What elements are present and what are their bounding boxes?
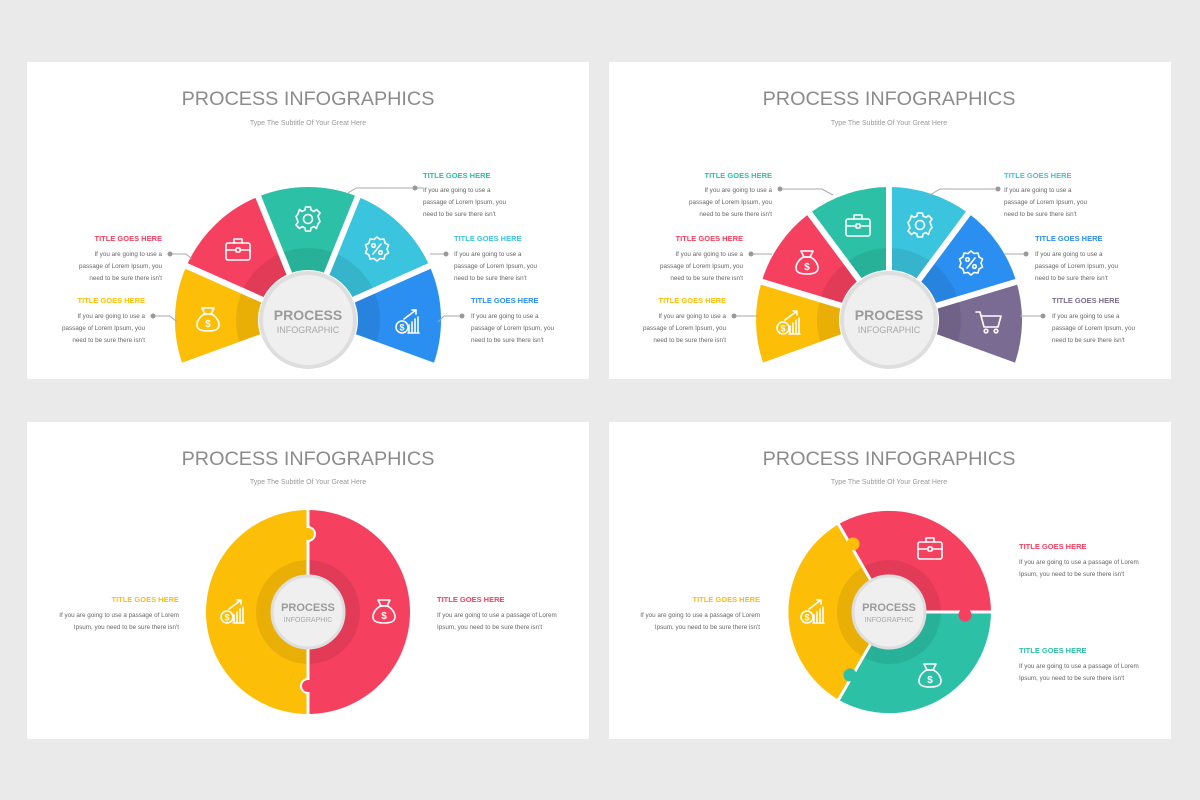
label: blue [1035,234,1118,282]
label: yellow: If you are going to use a [77,313,145,320]
circle chart: PROCESS [862,602,916,614]
label: blue: need to be sure there isn't [471,337,544,344]
fan chart: INFOGRAPHIC [277,325,340,335]
label: red [1019,542,1139,578]
label: cyan: need to be sure there isn't [454,275,527,282]
label: yellow: need to be sure there isn't [653,337,726,344]
label: teal [423,171,506,218]
panel: top-right fan of 6 [609,62,1171,379]
label: teal: passage of Lorem Ipsum, you [689,199,772,206]
label: cyan: TITLE GOES HERE [454,234,522,243]
fan chart [755,180,1023,368]
label: purple: passage of Lorem Ipsum, you [1052,325,1135,332]
label: red [660,234,743,282]
label: red: need to be sure there isn't [89,275,162,282]
leader lines [150,186,464,322]
label: teal: If you are going to use a passage of Lorem [1019,663,1139,670]
label: yellow: TITLE GOES HERE [692,595,760,604]
label: teal: If you are going to use a [423,187,491,194]
label: red: TITLE GOES HERE [94,234,162,243]
label: cyan: passage of Lorem Ipsum, you [1004,199,1087,206]
circle chart [206,505,410,719]
label: blue: TITLE GOES HERE [471,296,539,305]
label: purple: need to be sure there isn't [1052,337,1125,344]
title: PROCESS INFOGRAPHICS [182,448,434,470]
label: blue: passage of Lorem Ipsum, you [471,325,554,332]
label: yellow: TITLE GOES HERE [111,595,179,604]
label: blue [471,296,554,344]
label: yellow: Ipsum, you need to be sure there isn't [74,624,179,631]
label: yellow: Ipsum, you need to be sure there isn't [655,624,760,631]
circle chart: INFOGRAPHIC [865,617,913,624]
circle chart: PROCESS [281,602,335,614]
label: teal: passage of Lorem Ipsum, you [423,199,506,206]
label: cyan: passage of Lorem Ipsum, you [454,263,537,270]
label: red: Ipsum, you need to be sure there isn't [437,624,542,631]
label: yellow: TITLE GOES HERE [77,296,145,305]
label: red: TITLE GOES HERE [437,595,505,604]
label: red: passage of Lorem Ipsum, you [79,263,162,270]
fan chart: INFOGRAPHIC [858,325,921,335]
label: yellow: If you are going to use a passage of Lorem [640,612,760,619]
label: cyan: If you are going to use a [454,251,522,258]
label: yellow: If you are going to use a [658,313,726,320]
label: teal: TITLE GOES HERE [704,171,772,180]
label: cyan: need to be sure there isn't [1004,211,1077,218]
label: red: passage of Lorem Ipsum, you [660,263,743,270]
label: cyan [1004,171,1087,218]
title: PROCESS INFOGRAPHICS [182,88,434,110]
subtitle: Type The Subtitle Of Your Great Here [831,479,947,486]
label: blue: passage of Lorem Ipsum, you [1035,263,1118,270]
panel: top-left fan of 5 [27,62,589,379]
label: red: If you are going to use a passage of Lorem [1019,559,1139,566]
label: teal: TITLE GOES HERE [1019,646,1087,655]
label: red: TITLE GOES HERE [1019,542,1087,551]
label: red: need to be sure there isn't [670,275,743,282]
label: teal: Ipsum, you need to be sure there isn't [1019,675,1124,682]
label: blue: If you are going to use a [1035,251,1103,258]
label: yellow: passage of Lorem Ipsum, you [62,325,145,332]
label: teal: need to be sure there isn't [699,211,772,218]
label: red [437,595,557,631]
label: purple: TITLE GOES HERE [1052,296,1120,305]
label: red: Ipsum, you need to be sure there isn't [1019,571,1124,578]
fan chart [175,187,441,368]
label: cyan: TITLE GOES HERE [1004,171,1072,180]
label: yellow [62,296,145,344]
label: teal: need to be sure there isn't [423,211,496,218]
label: yellow: passage of Lorem Ipsum, you [643,325,726,332]
label: yellow [59,595,179,631]
label: yellow [640,595,760,631]
label: blue: If you are going to use a [471,313,539,320]
label: red [79,234,162,282]
label: red: TITLE GOES HERE [675,234,743,243]
label: red: If you are going to use a [94,251,162,258]
label: yellow [643,296,726,344]
fan chart: PROCESS [855,307,923,323]
fan chart: PROCESS [274,307,342,323]
label: yellow: TITLE GOES HERE [658,296,726,305]
subtitle: Type The Subtitle Of Your Great Here [250,479,366,486]
label: purple: If you are going to use a [1052,313,1120,320]
circle chart: INFOGRAPHIC [284,617,332,624]
subtitle: Type The Subtitle Of Your Great Here [831,120,947,127]
circle chart [788,511,996,713]
title: PROCESS INFOGRAPHICS [763,88,1015,110]
label: red: If you are going to use a [675,251,743,258]
label: teal [689,171,772,218]
panel: bottom-right three-piece circle [609,422,1171,739]
label: cyan [454,234,537,282]
label: yellow: need to be sure there isn't [72,337,145,344]
leader lines [732,186,1046,318]
label: blue: TITLE GOES HERE [1035,234,1103,243]
label: blue: need to be sure there isn't [1035,275,1108,282]
panel: bottom-left two-piece circle [27,422,589,739]
label: teal [1019,646,1139,682]
label: teal: If you are going to use a [704,187,772,194]
label: purple [1052,296,1135,344]
subtitle: Type The Subtitle Of Your Great Here [250,120,366,127]
title: PROCESS INFOGRAPHICS [763,448,1015,470]
label: yellow: If you are going to use a passage of Lorem [59,612,179,619]
label: red: If you are going to use a passage of Lorem [437,612,557,619]
label: teal: TITLE GOES HERE [423,171,491,180]
label: cyan: If you are going to use a [1004,187,1072,194]
